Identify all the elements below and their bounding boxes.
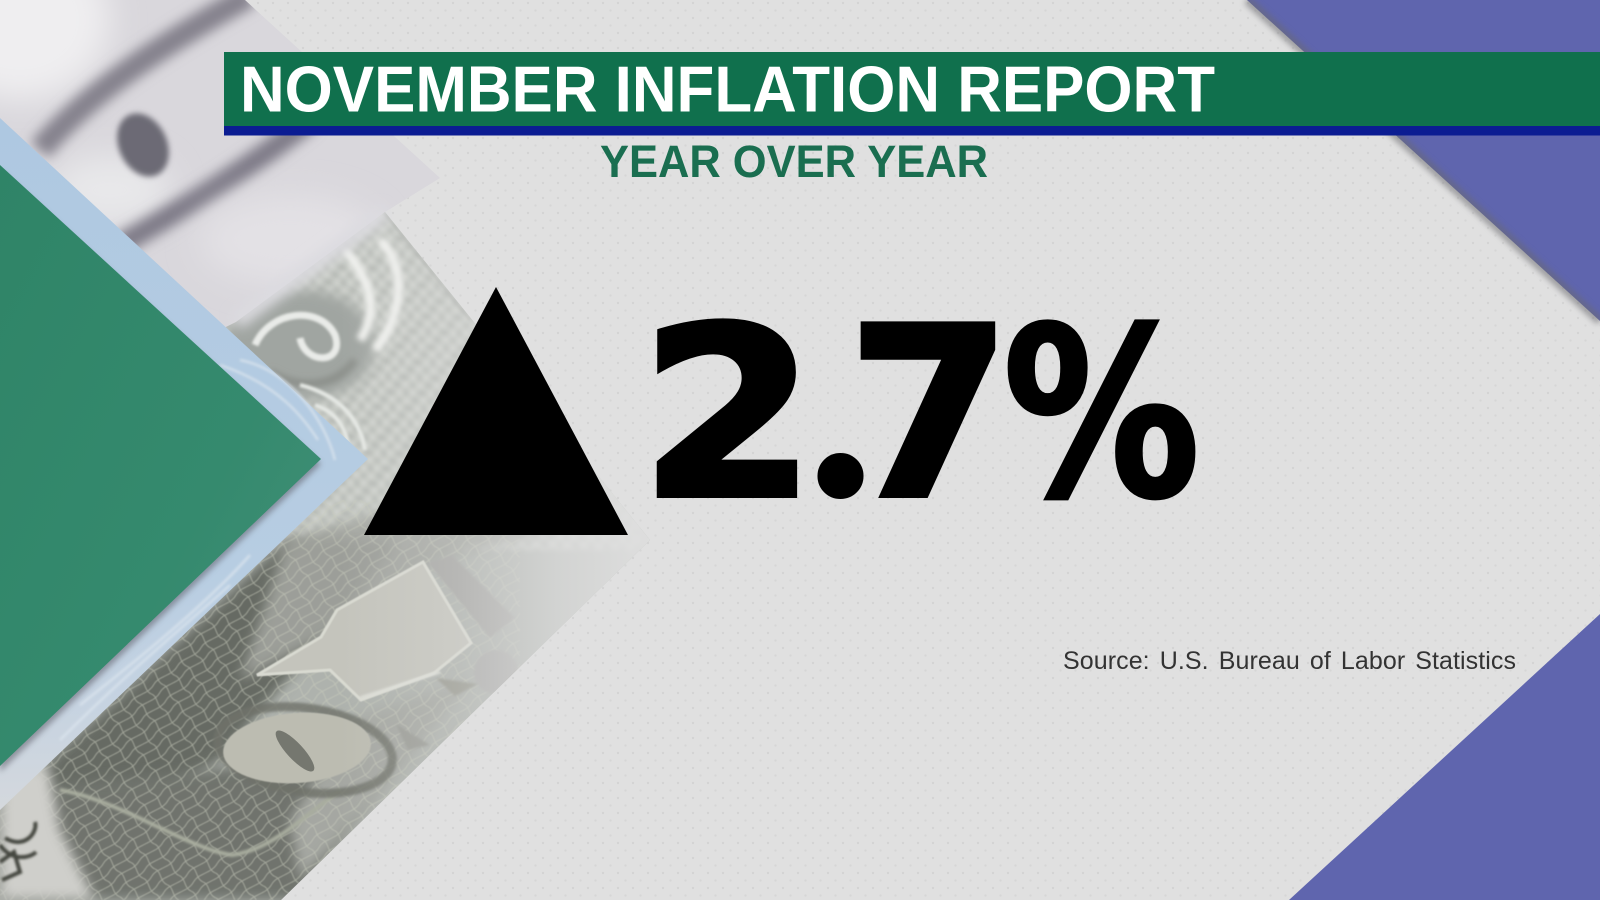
soft edge between top photo and bill: [236, 212, 385, 322]
big number: [640, 243, 1200, 557]
blue swirl: [60, 360, 335, 740]
right fade: [370, 251, 650, 788]
subtitle: YEAR OVER YEAR: [600, 136, 988, 187]
panel: purple corner top right: [1247, 0, 1600, 321]
lower-left fog: [0, 765, 95, 900]
panel: purple corner bottom right: [1289, 614, 1600, 900]
seal oval: [222, 712, 371, 784]
title banner: [224, 52, 1600, 136]
shield: [257, 562, 471, 700]
icon: up triangle: [364, 287, 628, 535]
corner print: [0, 822, 36, 880]
seal ring: [212, 696, 398, 804]
engraving: lower mesh: [0, 500, 560, 900]
panel: green chevron: [0, 165, 321, 772]
photo: dollar bill: [0, 200, 660, 900]
digit 2: 2: [640, 279, 816, 551]
seal bar: [276, 730, 314, 772]
engraving: upper scrollwork: [226, 214, 560, 550]
title: NOVEMBER INFLATION REPORT: [240, 52, 1215, 126]
panel: light blue chevron: [0, 118, 368, 810]
percent sign: %: [1003, 277, 1200, 550]
decimal point: .: [805, 243, 876, 557]
right strip and circle: [360, 555, 518, 750]
digit 7: 7: [848, 279, 1011, 551]
source note: Source: U.S. Bureau of Labor Statistics: [1063, 647, 1516, 675]
photo: rolled banknote top: [0, 0, 460, 340]
